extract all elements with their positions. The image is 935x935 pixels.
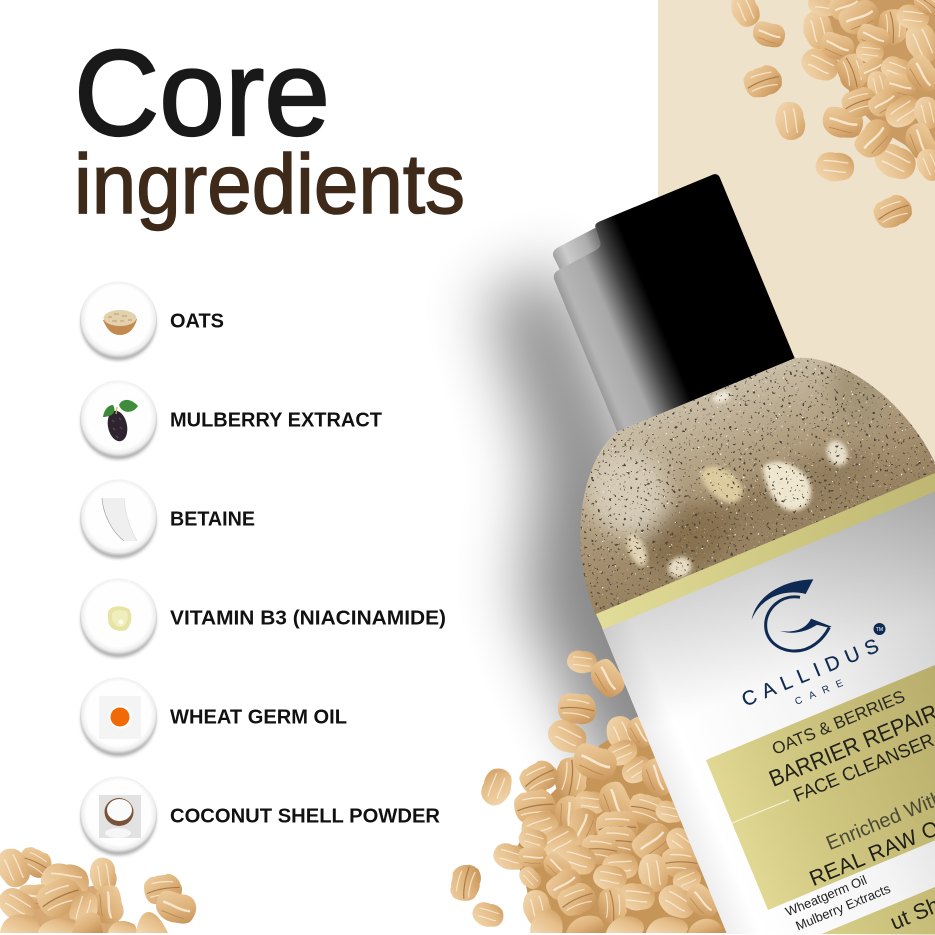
icon disc bbox=[80, 776, 157, 856]
label: mulberry extract: MULBERRY EXTRACT bbox=[170, 410, 382, 432]
logo wordmark: CARE bbox=[793, 678, 845, 708]
label: coconut shell powder: COCONUT SHELL POWDER bbox=[170, 806, 441, 828]
icon disc bbox=[80, 678, 157, 756]
oats: top right cluster bbox=[727, 0, 935, 232]
bottle drop shadow bbox=[410, 268, 776, 859]
ingredient list bbox=[80, 282, 446, 856]
label body bbox=[602, 490, 935, 934]
icon disc bbox=[80, 380, 157, 460]
title: Core ingredients bbox=[74, 25, 465, 231]
variant name: OATS & BERRIES bbox=[769, 687, 908, 759]
spout bbox=[549, 227, 607, 270]
icon: cream swipe bbox=[102, 498, 137, 541]
oats: bottom left pile bbox=[0, 842, 200, 933]
oats: bottom centre pile bbox=[446, 648, 728, 933]
icon: mulberry bbox=[103, 400, 138, 443]
bottle cap bbox=[540, 173, 795, 432]
bottle shoulder with scrub gel bbox=[580, 358, 935, 616]
gold title panel bbox=[706, 665, 935, 910]
trademark badge: TM bbox=[876, 627, 883, 633]
logo wordmark: CALLIDUS bbox=[739, 635, 882, 711]
bottle bbox=[533, 173, 935, 935]
ingredient: betaine bbox=[80, 480, 255, 558]
cap body bbox=[540, 173, 795, 432]
extras list: Wheatgerm Oil bbox=[783, 872, 869, 919]
trademark badge bbox=[874, 623, 886, 635]
ingredient: oats bbox=[80, 282, 224, 360]
label: oats: OATS bbox=[170, 310, 224, 332]
label top band bbox=[596, 473, 935, 630]
extras list: Mulberry Extracts bbox=[793, 881, 893, 933]
label: wheat germ oil: WHEAT GERM OIL bbox=[170, 706, 347, 728]
icon disc bbox=[80, 480, 157, 558]
gold lower panel bbox=[822, 886, 935, 935]
icon: oil dish bbox=[99, 696, 141, 739]
ingredient: coconut shell powder bbox=[80, 776, 441, 856]
ingredient: wheat germ oil bbox=[80, 678, 347, 756]
icon: coconut bowl bbox=[99, 795, 141, 838]
icon: serum drop bbox=[108, 606, 131, 631]
icon disc bbox=[80, 282, 157, 360]
bottle label bbox=[596, 473, 935, 935]
panel rule bbox=[732, 800, 789, 823]
ingredient: vitamin b3 bbox=[80, 578, 446, 658]
icon disc bbox=[80, 578, 157, 658]
icon: bowl of oats bbox=[103, 310, 137, 335]
heading: Core: Core bbox=[74, 25, 330, 161]
heading: ingredients: ingredients bbox=[74, 137, 465, 231]
ingredient: mulberry extract bbox=[80, 380, 382, 460]
logo mark bbox=[752, 579, 832, 651]
logo: Callidus Care bbox=[739, 579, 886, 711]
cream background panel bbox=[658, 0, 935, 490]
label: betaine: BETAINE bbox=[170, 508, 255, 530]
label: vitamin b3: VITAMIN B3 (NIACINAMIDE) bbox=[170, 608, 446, 630]
